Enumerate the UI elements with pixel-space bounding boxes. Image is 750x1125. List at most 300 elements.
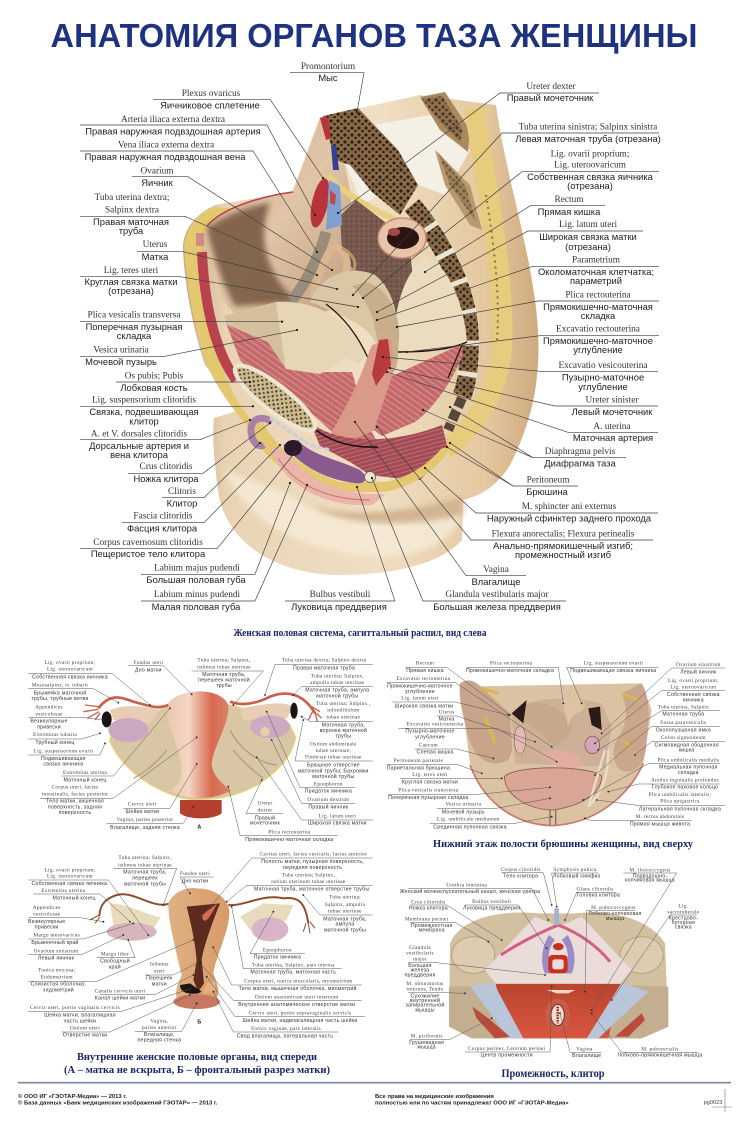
sacrum segments bbox=[412, 205, 469, 396]
label: M. obturatorius internus: M. obturatorius bbox=[406, 981, 444, 987]
label B: Epoophoron: Epoophoron bbox=[263, 947, 292, 953]
label B: Canalis cervicis uteri: Canalis cervicis uteri bbox=[95, 988, 146, 994]
label B: Appendices vesiculosae: vesiculosae bbox=[33, 911, 61, 917]
label: Excavatio vesicouterina: Excavatio vesicouterina bbox=[406, 722, 464, 728]
label A: Tuba ampulla bbox=[293, 673, 373, 699]
label A: Corpus uteri: Тело матки, кишечная bbox=[46, 799, 104, 805]
label B: Tuba pars uterina bbox=[232, 907, 342, 976]
label: Plica rectouterina: Plica rectouterina bbox=[490, 661, 532, 667]
label: Peritoneum: Брюшина bbox=[526, 486, 569, 497]
label B: Tunica mucosa: Слизистая оболочка; bbox=[31, 981, 86, 987]
label B: Tuba ostium uterinum: ostium uterinum tubae uterinae bbox=[271, 879, 346, 885]
label B: Fornix vaginae: Fornix vaginae, pars lateralis bbox=[251, 1026, 321, 1032]
label: Plica vesicalis transversa bbox=[388, 787, 550, 801]
label B: Tunica mucosa bbox=[28, 940, 193, 993]
label: M. piriformis: мышца bbox=[417, 1045, 436, 1051]
label: Anulus inguinalis profundus: Anulus inguinalis profundus bbox=[651, 776, 719, 783]
label A: Cervix uteri: Шейка матки bbox=[125, 808, 159, 815]
label: Arteria iliaca externa dextra: Правая наружная подвздошная артерия bbox=[85, 126, 261, 137]
label: Lig. teres uteri: Lig. teres uteri bbox=[104, 266, 159, 276]
label: Corpus perinei: Corpus perinei; Centrum perinei bbox=[468, 1046, 546, 1052]
caption: internal organs: Внутренние женские половые органы, вид спереди bbox=[77, 1052, 317, 1063]
label A: Ureter dexter: Ureter bbox=[257, 801, 273, 807]
title: АНАТОМИЯ ОРГАНОВ ТАЗА ЖЕНЩИНЫ bbox=[50, 17, 698, 54]
label: Fascia clitoridis bbox=[122, 445, 280, 534]
caption: perineum: Промежность, клитор bbox=[502, 1066, 605, 1080]
label A: Appendices vesiculosae: vesiculosae bbox=[35, 711, 63, 717]
label: A. uterina: A. uterina bbox=[593, 422, 631, 432]
label: Plica rectouterina: Прямокишечно-маточная bbox=[543, 301, 653, 312]
label: Peritoneum bbox=[447, 443, 578, 497]
label: Caecum bbox=[415, 743, 493, 758]
label: Lig. suspensorium clitoridis: клитор bbox=[129, 416, 159, 427]
label: Lig. ovarii proprium: Собственная связка bbox=[667, 692, 720, 698]
label: Flexura anorectalis: Flexura anorectalis; Flexura perinealis bbox=[492, 530, 635, 540]
label: Excavatio rectouterina bbox=[407, 325, 659, 355]
label A: Tuba infundibulum: tubae uterinae bbox=[326, 714, 361, 720]
label A: Ostium abdominale: маточной трубы bbox=[312, 773, 354, 780]
label: Bulbus vestibuli: Луковица преддверия bbox=[463, 906, 520, 912]
label B: Cervix supravaginalis: Cervix uteri, portio supravaginalis cervicis bbox=[249, 1011, 351, 1017]
label A: Plica rectouterina: Plica rectouterina bbox=[268, 829, 311, 835]
label B: Tuba pars uterina: Маточная труба, маточная часть bbox=[250, 970, 336, 976]
label B: Epoophoron: Придаток яичника bbox=[254, 955, 301, 961]
label B: Ovarium sinistrum bbox=[28, 935, 123, 962]
label: Fascia clitoridis: Фасция клитора bbox=[127, 523, 198, 534]
label: Ureter dexter: Правый мочеточник bbox=[507, 92, 594, 103]
label: Labium majus pudendi bbox=[141, 483, 290, 585]
label A: Tuba infundibulum: воронка маточной bbox=[320, 727, 367, 734]
label A: Ostium abdominale: Брюшное отверстие bbox=[307, 763, 360, 769]
label: Parametrium: Околоматочная клетчатка; bbox=[538, 266, 654, 277]
label: Lig. sacrotuberale: sacrotuberale bbox=[667, 909, 700, 915]
label A: Ostium abdominale: tubae uterinae; bbox=[316, 748, 351, 754]
label: Vagina: Влагалище bbox=[572, 1053, 601, 1059]
label A: Ovarium dextrum bbox=[272, 740, 355, 811]
letter Б: Б bbox=[197, 1019, 201, 1025]
right tube loop bbox=[312, 247, 347, 298]
label: Crus clitoridis bbox=[128, 423, 270, 484]
label: Lig. teres uteri: Lig. teres uteri bbox=[412, 772, 448, 778]
label B: Ovarium sinistrum: Ovarium sinistrum bbox=[34, 948, 79, 954]
label: Ovarium: Ovarium bbox=[140, 167, 174, 177]
label: Ovarium sinistrum bbox=[602, 662, 725, 733]
label: Tuba uterina dextra: Tuba uterina dextra; bbox=[94, 193, 170, 203]
label B: Margo liber: Margo liber bbox=[101, 951, 129, 957]
label: Plexus ovaricus bbox=[153, 89, 323, 178]
label: Uterus bbox=[437, 709, 535, 742]
label: Lig. ovarii proprium: Lig. uteroovaricum bbox=[554, 161, 627, 171]
label A: Tuba infundibulum: infundibulum bbox=[327, 707, 360, 714]
label: Glandula vestibularis major: железа bbox=[411, 968, 429, 974]
label: Lig. umbilicale medianum: Lig. umbilicale medianum bbox=[437, 817, 500, 823]
bladder bbox=[224, 302, 367, 374]
label: Plica vesicalis transversa bbox=[80, 311, 282, 341]
footer rule bbox=[18, 1082, 731, 1084]
label A: Lig. ovarii proprium: Lig. ovarii proprium; bbox=[45, 660, 96, 666]
label: Membrana perinei bbox=[405, 916, 488, 942]
label: Peritoneum parietale: Peritoneum parietale bbox=[394, 758, 443, 764]
fat under pubis bbox=[246, 420, 449, 492]
label: Lig. ovarii proprium bbox=[595, 678, 725, 743]
label: Glandula vestibularis major: Большая bbox=[408, 963, 432, 969]
label B: Tuba ampulla bbox=[303, 895, 373, 933]
label: Bulbus vestibuli: Bulbus vestibuli bbox=[472, 899, 511, 905]
label: Tuba uterina: Маточная труба bbox=[662, 711, 704, 717]
label: Colon sigmoideum bbox=[635, 735, 725, 755]
label: Arteria iliaca externa dextra: Arteria iliaca externa dextra bbox=[121, 115, 225, 125]
label B: Extremitas uterina: Extremitas uterina bbox=[41, 888, 86, 894]
label A: Fundus uteri: Дно матки bbox=[135, 668, 162, 674]
label: Membrana perinei: Промежностная bbox=[411, 923, 453, 929]
main illustration: sagittal section of female pelvis bbox=[183, 92, 538, 575]
label: Ureter sinister: Левый мочеточник bbox=[572, 406, 653, 417]
label: Vena iliaca externa dextra bbox=[80, 141, 317, 252]
label: Lig. ovarii proprium: Lig. uteroovaricum bbox=[670, 685, 717, 691]
label: Lig. latum uteri: Lig. latum uteri bbox=[401, 696, 439, 702]
label: Plica rectouterina bbox=[397, 291, 659, 327]
label B: Ostium anatomicum: Ostium anatomicum uteri internum bbox=[255, 994, 339, 1000]
label B: Cervix supravaginalis bbox=[207, 977, 365, 1024]
clitoris bbox=[251, 418, 272, 446]
label A: Tuba uterina dextra: Tuba uterina dextra; Salpinx dextra bbox=[282, 657, 367, 663]
footer rights bbox=[375, 1093, 569, 1106]
label: Diaphragma pelvis bbox=[423, 407, 626, 469]
label: Ureter sinister bbox=[390, 368, 658, 417]
label B: Tuba ampulla: Salpinx, ampulla bbox=[325, 902, 366, 908]
label: Symphysis pubica: Symphysis pubica bbox=[553, 867, 597, 873]
caption: internal organs: (А – матка не вскрыта, Б – фронтальный разрез матки) bbox=[64, 1065, 330, 1076]
levator muscle anterior bbox=[226, 323, 376, 442]
label B: Vagina paries anterior: Влагалище, bbox=[144, 1032, 175, 1038]
label B: Tuba isthmus: перешеек bbox=[132, 875, 158, 881]
product code: pg0023 bbox=[704, 1100, 722, 1106]
label B: Corpus uteri myometrium: Corpus uteri, tunica muscularis, myometrium bbox=[244, 978, 353, 984]
label: M. rectus abdominis: M. rectus abdominis bbox=[636, 814, 684, 820]
label: Rectum: Rectum bbox=[416, 661, 435, 667]
label A: Ostium abdominale bbox=[295, 720, 373, 780]
label: Excavatio rectouterina: углубление bbox=[405, 689, 435, 695]
label: Tuba uterina sinistra: Левая маточная труба (отрезана) bbox=[515, 133, 661, 144]
label A: Tuba infundibulum: Tuba uterina; Salpinx , bbox=[316, 701, 371, 707]
label: Os pubis bbox=[116, 372, 250, 393]
label: Plica umbilicalis lateralis: Plica epigastrica bbox=[660, 799, 700, 805]
label A: Appendices vesiculosae: Appendices bbox=[35, 705, 63, 711]
label: Tuba uterina dextra bbox=[80, 193, 317, 275]
label B: Isthmus uteri: матки bbox=[152, 981, 167, 987]
label: Lig. teres uteri bbox=[400, 772, 502, 785]
posterior wall bbox=[207, 118, 360, 320]
label B: Tuba isthmus bbox=[113, 855, 177, 905]
label A: Mesosalpinx: Брыжейка маточной bbox=[34, 689, 86, 696]
footer rights: Все права на медицинские изображения bbox=[375, 1093, 494, 1100]
label: Plica umbilicalis medialis bbox=[583, 757, 720, 800]
label: Labium majus pudendi: Labium majus pudendi bbox=[154, 564, 240, 574]
label: Excavatio rectouterina: Excavatio rectouterina bbox=[396, 676, 451, 682]
label: Vagina: Влагалище bbox=[472, 576, 520, 587]
label: M. rectus abdominis: Прямая мышца живота bbox=[630, 821, 690, 827]
label A: Ostium abdominale: маточной трубы; Бахромки bbox=[298, 767, 369, 774]
label: Glandula vestibularis major: vestibularis bbox=[406, 951, 434, 957]
label A: Appendices vesiculosae bbox=[28, 705, 103, 731]
label A: Tuba ampulla: Маточная труба, ампула bbox=[305, 687, 369, 693]
label: Uterus: Uterus bbox=[439, 709, 455, 715]
label A: Tuba isthmus: трубы bbox=[216, 683, 232, 689]
label: Labium majus pudendi: Большая половая губа bbox=[146, 574, 246, 585]
label: M. sphincter ani externus: Наружный сфинктер заднего прохода bbox=[487, 513, 652, 524]
label: Lig. suspensorium ovarii: Lig. suspensorium ovarii bbox=[584, 661, 643, 667]
label: Lig. suspensorium clitoridis bbox=[80, 396, 253, 427]
label: Anulus inguinalis profundus: Глубокое паховое кольцо bbox=[652, 785, 718, 791]
label: Crus clitoridis: Ножка клитора bbox=[409, 906, 448, 912]
label: Tuba uterina bbox=[598, 704, 720, 750]
label B: Tuba ostium uterinum: Маточная труба, маточное отверстие трубы bbox=[254, 886, 369, 892]
label B: Cavitas uteri bbox=[202, 851, 373, 917]
label: Flexura anorectalis: промежностный изгиб bbox=[515, 549, 611, 560]
main callouts bbox=[80, 62, 661, 612]
letter A: А bbox=[197, 825, 201, 831]
label: Lig. latum uteri: Lig. latum uteri bbox=[559, 220, 617, 230]
label: Os pubis: Лобковая кость bbox=[120, 382, 188, 393]
label B: Ostium anatomicum: Внутреннее анатомическое отверстие матки bbox=[238, 1002, 355, 1008]
label: Excavatio vesicouterina bbox=[398, 722, 557, 762]
label: A. et V. dorsales clitoridis bbox=[80, 420, 250, 460]
label: Lig. latum uteri: (отрезана) bbox=[565, 241, 611, 252]
label: Lig. teres uteri: Круглая связка матки bbox=[84, 276, 178, 287]
label: Vesica urinaria: Vesica urinaria bbox=[445, 802, 482, 808]
label A: Extremitas tubaria: Extremitas tubaria bbox=[33, 732, 77, 738]
label: Excavatio rectouterina: углубление bbox=[573, 344, 623, 355]
label: Vagina: Vagina bbox=[576, 1046, 593, 1052]
label: Corpus cavernosum clitoridis: Corpus cavernosum clitoridis bbox=[93, 538, 203, 548]
label: Plica vesicalis transversa: Поперечная пузырная bbox=[86, 321, 182, 332]
label A: Lig. suspensorium ovarii: Lig. suspensorium ovarii bbox=[34, 749, 93, 755]
label A: Vagina paries posterior: Влагалище, задняя стенка bbox=[110, 825, 180, 831]
label A: Ureter dexter bbox=[246, 780, 283, 827]
label A: Ureter dexter: dexter bbox=[258, 807, 272, 813]
illustration A bbox=[83, 691, 322, 818]
label: Colon sigmoideum: Сигмовидная ободочная bbox=[655, 742, 719, 748]
label A: Ureter dexter: Правый bbox=[255, 814, 275, 821]
label: Glandula vestibularis major bbox=[404, 945, 545, 979]
label: Plica rectouterina bbox=[466, 661, 563, 703]
label B: Tuba ampulla: Маточная труба, bbox=[323, 916, 367, 922]
label: Rectum bbox=[405, 661, 510, 715]
label: Clitoris bbox=[162, 443, 260, 509]
label A: Vagina paries posterior bbox=[107, 807, 193, 831]
footer copyright: © База данных «Банк медицинских изображений ГЭОТАР» — 2013 г. bbox=[18, 1100, 218, 1106]
label: Glans clitoridis: Головка клитора bbox=[577, 893, 620, 899]
panel: perineum and clitoris bbox=[400, 867, 703, 1059]
label B: Cavitas uteri: Cavitas uteri, facies vesicalis, facies anterior bbox=[260, 851, 367, 858]
label B: Extremitas uterina bbox=[33, 888, 130, 922]
label: Plica rectouterina: складка bbox=[581, 310, 616, 321]
label: Glandula vestibularis major bbox=[372, 478, 566, 612]
label A: Ostium abdominale: Ostium abdominale bbox=[310, 741, 357, 747]
label: Lig. ovarii proprium: Lig. ovarii proprium; bbox=[668, 678, 719, 684]
label: Glandula vestibularis major: Glandula bbox=[409, 945, 431, 951]
label: Diaphragma pelvis: Diaphragma pelvis bbox=[545, 447, 616, 457]
pelvic floor muscles bbox=[310, 422, 447, 480]
label: Bulbus vestibuli: Луковица преддверия bbox=[291, 601, 387, 612]
label A: Cervix uteri: Cervix uteri bbox=[128, 802, 157, 808]
label: Excavatio rectouterina: Прямокишечно-маточное bbox=[543, 335, 653, 346]
label: Lig. ovarii proprium: Собственная связка яичника bbox=[527, 171, 654, 182]
label: Lig. sacrotuberale: Крестцово- bbox=[669, 915, 698, 921]
labia bbox=[269, 446, 386, 505]
label A: Lig. ovarii proprium: Собственная связка яичника bbox=[32, 674, 108, 680]
label B: Tuba isthmus: Маточная труба, bbox=[123, 870, 167, 876]
label B: Canalis cervicis uteri bbox=[95, 975, 193, 1002]
label: Lig. latum uteri bbox=[377, 220, 643, 312]
label: Labium minus pudendi bbox=[141, 485, 307, 612]
panel B: frontal section of uterus bbox=[28, 851, 373, 1044]
label A: Tuba isthmus: isthmus tubae uterinae bbox=[197, 664, 251, 670]
label B: Tuba ostium uterinum bbox=[227, 872, 373, 902]
label: M. pubococcygeus: Лобково-копчиковая bbox=[588, 911, 642, 917]
label B: Appendices vesiculosae: Везикулярные bbox=[28, 919, 65, 925]
label A: Fundus uteri: Fundus uteri bbox=[133, 660, 164, 666]
label A: Appendices vesiculosae: Везикулярные bbox=[30, 719, 68, 725]
label A: Tuba infundibulum bbox=[302, 701, 373, 739]
label: Bulbus vestibuli: Bulbus vestibuli bbox=[310, 590, 371, 600]
label: Symphysis pubica bbox=[552, 867, 601, 907]
label A: Extremitas uterina bbox=[62, 708, 170, 783]
label: Bulbus vestibuli bbox=[463, 899, 547, 948]
label: Plica umbilicalis lateralis: Латеральная пупочная складка bbox=[639, 807, 721, 813]
label: Corpus perinei: Центр промежности bbox=[481, 1053, 533, 1059]
label A: Mesosalpinx bbox=[28, 683, 118, 703]
label A: Corpus uteri: intestinalis, facies posterior bbox=[42, 790, 108, 797]
label A: Appendices vesiculosae: привески bbox=[37, 725, 61, 731]
external iliac vessels bbox=[307, 177, 333, 229]
panel: lower peritoneal cavity from above bbox=[387, 661, 725, 830]
label: Ovarium: Яичник bbox=[141, 177, 174, 188]
label: Corpus clitoridis: Corpus clitoridis bbox=[501, 867, 541, 873]
label: Caecum: Слепая кишка bbox=[416, 749, 453, 755]
label B: Margo mesovaricus: Margo mesovaricus bbox=[33, 933, 80, 939]
label: Excavatio vesicouterina bbox=[383, 357, 658, 392]
label: Tuba uterina dextra: труба bbox=[119, 225, 144, 236]
label A: Extremitas tubaria bbox=[28, 732, 100, 746]
label: Symphysis pubica: Лобковый симфиз bbox=[553, 872, 601, 879]
label: Uterus: Uterus bbox=[143, 240, 168, 250]
label: M. obturatorius internus: Сухожилие bbox=[411, 993, 439, 999]
label: Diaphragma pelvis: Диафрагма таза bbox=[544, 458, 617, 469]
label: Lig. ovarii proprium: яичника bbox=[683, 698, 704, 704]
label B: Fundus uteri: Fundus uteri bbox=[180, 871, 210, 877]
label B: Fundus uteri bbox=[180, 871, 213, 893]
label B: Ostium uteri bbox=[62, 995, 190, 1039]
label B: Tuba ampulla: tubae uterinae bbox=[328, 909, 362, 915]
label: M. pubococcygeus bbox=[585, 905, 642, 992]
label B: Lig. ovarii proprium: Собственная связка яичника bbox=[31, 881, 107, 887]
label B: Tuba isthmus: маточной трубы bbox=[124, 880, 166, 887]
label A: Corpus uteri: поверхность, задняя bbox=[48, 804, 102, 810]
label: M. piriformis: Грушевидная bbox=[409, 1040, 444, 1046]
label: M. obturatorius internus: запирательной bbox=[405, 1002, 445, 1009]
label: Excavatio vesicouterina: углубление bbox=[578, 381, 628, 392]
caption: sagittal section: Женская половая система, сагиттальный распил, вид слева bbox=[234, 628, 487, 639]
label: Plica vesicalis transversa: Plica vesicalis transversa bbox=[398, 788, 459, 794]
label: M. puborectalis bbox=[592, 1013, 703, 1059]
label: Uterus: Матка bbox=[142, 251, 169, 262]
levator muscle posterior bbox=[374, 344, 463, 436]
label A: Lig. latum uteri bbox=[257, 757, 373, 827]
label B: Lig. ovarii proprium: Lig. ovarii proprium; bbox=[45, 867, 96, 873]
label: Anulus inguinalis profundus bbox=[608, 776, 720, 792]
label: Fascia clitoridis: Fascia clitoridis bbox=[133, 512, 193, 522]
label: Tuba uterina dextra: Salpinx dextra bbox=[105, 206, 159, 216]
label B: Appendices vesiculosae bbox=[28, 905, 103, 930]
label B: Fundus uteri: Дно матки bbox=[182, 878, 208, 884]
label: Plexus ovaricus: Plexus ovaricus bbox=[182, 89, 241, 99]
label B: Tuba isthmus: Tuba uterina; Salpinx, bbox=[118, 855, 172, 861]
label: A. et V. dorsales clitoridis: A. et V. dorsales clitoridis bbox=[91, 430, 187, 440]
label B: Isthmus uteri bbox=[145, 962, 200, 987]
label: Parametrium: параметрий bbox=[570, 275, 622, 286]
label: Lig. umbilicale medianum bbox=[430, 817, 552, 830]
label: M. pubococcygeus: мышца bbox=[606, 916, 624, 922]
label: Promontorium bbox=[290, 62, 364, 112]
label: Glandula vestibularis major: Большая железа преддверия bbox=[433, 601, 561, 612]
label: Vesica urinaria: Мочевой пузырь bbox=[442, 808, 485, 815]
label: Crus clitoridis: Crus clitoridis bbox=[411, 899, 446, 905]
label A: Mesosalpinx: Mesosalpinx, rr. tubarii bbox=[32, 683, 88, 689]
label: Os pubis: Os pubis; Pubis bbox=[125, 372, 184, 382]
label B: Ostium uteri: Отверстие матки bbox=[63, 1033, 107, 1039]
label A: Extremitas uterina: Extremitas uterina bbox=[63, 770, 107, 776]
label A: Fundus uteri bbox=[128, 660, 192, 694]
label: Parametrium: Parametrium bbox=[572, 256, 621, 266]
label B: Margo mesovaricus bbox=[28, 923, 133, 946]
label: Ureter sinister: Ureter sinister bbox=[586, 396, 639, 406]
label: Parametrium bbox=[377, 256, 659, 320]
illustration perineum bbox=[449, 908, 668, 1038]
label: Plica umbilicalis lateralis: Plica umbilicalis lateralis; bbox=[649, 792, 712, 798]
label: Plexus ovaricus: Яичниковое сплетение bbox=[160, 100, 260, 111]
label: Lig. suspensorium ovarii bbox=[567, 661, 658, 703]
label A: Lig. latum uteri: Широкая связка матки bbox=[308, 821, 367, 827]
label: M. pubococcygeus: M. pubococcygeus bbox=[591, 905, 636, 911]
label: Uterus bbox=[137, 240, 337, 289]
label B: Vagina paries anterior: paries anterior bbox=[142, 1025, 177, 1031]
label A: Lig. ovarii proprium: Lig. uteroovaricum bbox=[47, 667, 94, 673]
label A: Epoophoron: Придаток яичника bbox=[305, 789, 352, 795]
label A: Tuba infundibulum: трубы bbox=[335, 733, 351, 739]
footer copyright bbox=[18, 1093, 218, 1106]
vestibular gland bbox=[364, 472, 376, 482]
label: Clitoris: Clitoris bbox=[168, 487, 196, 497]
label A: Tuba infundibulum: Маточная труба, bbox=[322, 723, 365, 729]
label: Caecum: Caecum bbox=[419, 743, 438, 749]
label: Crus clitoridis bbox=[409, 899, 502, 940]
label A: Extremitas tubaria: Трубный конец bbox=[35, 739, 75, 746]
label: Excavatio rectouterina: Прямокишечно-маточное bbox=[387, 683, 453, 689]
label: M. sphincter ani externus: M. sphincter ani externus bbox=[522, 502, 617, 512]
product code bbox=[704, 1089, 732, 1112]
label: M. obturatorius internus bbox=[405, 981, 465, 1014]
label: M. puborectalis: M. puborectalis bbox=[641, 1046, 679, 1052]
label: Tuba uterina sinistra: Tuba uterina sinistra; Salpinx sinistra bbox=[519, 123, 657, 133]
label B: Tuba ampulla: Tuba uterina; bbox=[329, 895, 361, 901]
label: Flexura anorectalis bbox=[377, 427, 653, 560]
label: Lig. sacrotuberale: бугорная bbox=[672, 920, 695, 926]
label A: Tuba isthmus bbox=[192, 658, 263, 705]
label: Plica vesicalis transversa: Поперечная пузырная складка bbox=[388, 795, 469, 801]
label A: Corpus uteri bbox=[40, 737, 197, 816]
label: Ovarium sinistrum: Левый яичник bbox=[680, 668, 717, 675]
